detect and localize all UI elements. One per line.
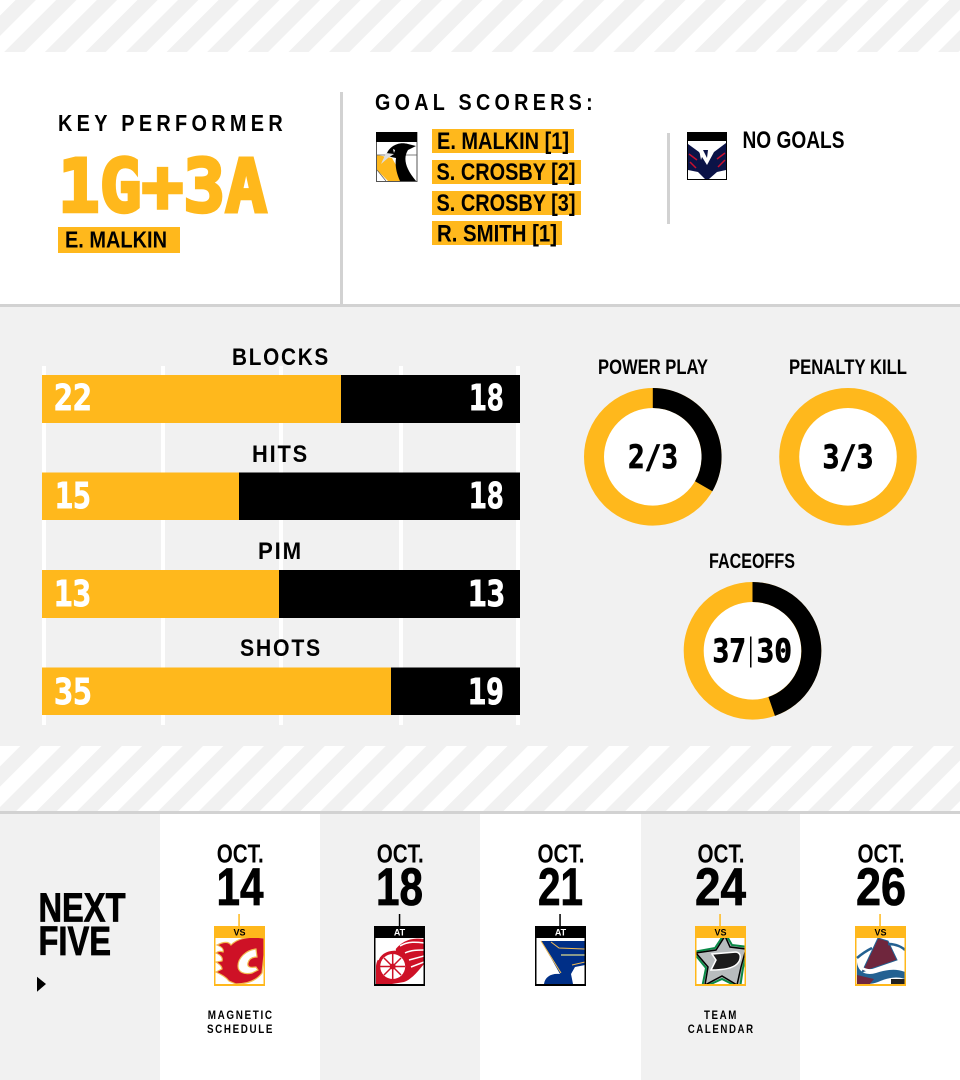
- bar chart: hits: 18: [469, 476, 504, 517]
- game: Oct 21: 21: [538, 858, 583, 917]
- game: Oct 21: [535, 838, 586, 986]
- goal list: Penguins: [432, 128, 581, 248]
- heading: goal scorers: GOAL SCORERS:: [375, 89, 597, 115]
- link label: team calendar: TEAM: [704, 1008, 738, 1022]
- donut chart: penalty kill: PENALTY KILL: [789, 356, 907, 379]
- bar chart: blocks: [42, 344, 520, 423]
- game: Oct 21: OCT.: [538, 838, 584, 868]
- bar chart: blocks: 18: [469, 378, 504, 419]
- donut chart: penalty kill: [789, 356, 907, 516]
- game: Oct 26: 26: [856, 858, 906, 917]
- panel: game summary: [0, 52, 960, 307]
- panel: next five schedule: [37, 814, 960, 1080]
- icon: penguins logo: [376, 132, 417, 182]
- heading: next five: NEXT: [38, 885, 126, 931]
- donut chart: penalty kill: 3/3: [822, 438, 874, 476]
- icon: capitals logo: [687, 132, 727, 180]
- bar chart: blocks: BLOCKS: [232, 344, 330, 371]
- donut chart: faceoffs: 30: [756, 632, 792, 670]
- icon: arrow: [37, 977, 46, 992]
- goal: S. Crosby 3: S. CROSBY [3]: [436, 190, 576, 217]
- game: Oct 26: VS: [874, 928, 887, 938]
- bar chart: hits: [42, 441, 520, 520]
- game: Oct 24: [695, 844, 746, 986]
- bar chart: pim: [42, 538, 520, 618]
- heading: next five: FIVE: [38, 918, 111, 964]
- bar chart: pim: 13: [54, 574, 91, 615]
- text: no goals: NO GOALS: [742, 127, 844, 154]
- donut chart: power play: 2/3: [628, 438, 678, 476]
- bar chart: shots: 19: [468, 672, 504, 713]
- key performer block: [58, 110, 287, 253]
- bar chart: shots: [42, 635, 520, 715]
- link label: magnetic schedule: SCHEDULE: [207, 1022, 274, 1036]
- link label: magnetic schedule: MAGNETIC: [208, 1008, 274, 1022]
- goal: S. Crosby 2: S. CROSBY [2]: [436, 159, 576, 186]
- icon: blues logo: [541, 941, 585, 984]
- icon: red wings logo: [376, 939, 424, 984]
- game: Oct 24: VS: [714, 928, 727, 938]
- game: Oct 14: OCT.: [217, 838, 264, 868]
- donut chart: faceoffs: FACEOFFS: [709, 550, 795, 573]
- game: Oct 24: 24: [695, 858, 746, 917]
- game: Oct 24: OCT.: [698, 838, 744, 868]
- game: Oct 26: [855, 838, 906, 986]
- goal: R. Smith: R. SMITH [1]: [437, 220, 557, 248]
- donut chart: faceoffs: 37: [712, 632, 746, 670]
- player name: E. Malkin: E. MALKIN: [65, 226, 167, 252]
- bar chart: hits: 15: [55, 476, 91, 517]
- heading: next five: [38, 885, 126, 964]
- icon: avalanche logo: [857, 938, 905, 985]
- game: Oct 14: [214, 838, 265, 986]
- link label: magnetic schedule: [207, 1008, 274, 1036]
- game: Oct 18: AT: [394, 928, 406, 938]
- game: Oct 21: AT: [555, 928, 567, 938]
- icon: stars logo: [696, 938, 744, 984]
- game: Oct 14: VS: [233, 928, 246, 938]
- stat: 1G+3A: 1G+3A: [58, 144, 267, 230]
- game: Oct 18: OCT.: [377, 838, 424, 868]
- donut chart: power play: [594, 356, 712, 516]
- icon: flames logo: [216, 937, 264, 984]
- game: Oct 18: 18: [376, 858, 423, 917]
- bar chart: blocks: 22: [54, 378, 92, 419]
- game: Oct 14: 14: [216, 858, 264, 917]
- bar chart: hits: HITS: [252, 441, 309, 468]
- goal: E. Malkin: E. MALKIN [1]: [437, 128, 569, 155]
- panel: team stats: [42, 344, 907, 725]
- game: Oct 18: [374, 838, 425, 986]
- bar chart: pim: 13: [468, 574, 505, 615]
- donut chart: power play: POWER PLAY: [598, 356, 708, 379]
- heading: key performer: KEY PERFORMER: [58, 110, 287, 136]
- link label: team calendar: [688, 1008, 755, 1036]
- donut chart: faceoffs: [694, 550, 811, 710]
- bar chart: shots: 35: [54, 672, 92, 713]
- bar chart: pim: PIM: [258, 538, 303, 565]
- link label: team calendar: CALENDAR: [688, 1022, 755, 1036]
- game: Oct 26: OCT.: [858, 838, 904, 868]
- bar chart: shots: SHOTS: [240, 635, 322, 662]
